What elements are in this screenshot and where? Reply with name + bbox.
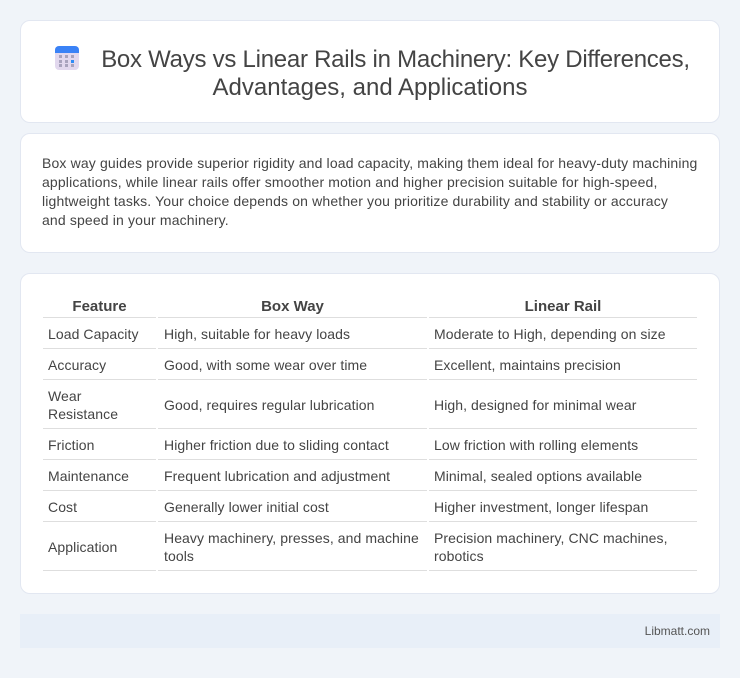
comparison table: Accuracy xyxy=(48,357,106,373)
comparison table: Good, requires regular lubrication xyxy=(164,397,374,413)
comparison table: Higher investment, longer lifespan xyxy=(434,499,648,515)
intro text: and speed in your machinery. xyxy=(42,212,229,228)
intro text: lightweight tasks. Your choice depends on whether you prioritize durability and stability or accuracy xyxy=(42,193,668,209)
intro text: applications, while linear rails offer smoother motion and higher precision suitable for high-speed, xyxy=(42,174,658,190)
comparison table: Feature xyxy=(72,298,127,315)
comparison table: Friction xyxy=(48,437,95,453)
intro text xyxy=(42,155,698,228)
comparison table: Good, with some wear over time xyxy=(164,357,367,373)
footer credit: Libmatt.com xyxy=(645,624,710,638)
comparison table: Excellent, maintains precision xyxy=(434,357,621,373)
footer xyxy=(20,614,720,648)
comparison table: Box Way xyxy=(261,298,324,315)
comparison table: Maintenance xyxy=(48,468,129,484)
comparison table: Low friction with rolling elements xyxy=(434,437,638,453)
panel: title card xyxy=(20,20,720,123)
comparison table: Cost xyxy=(48,499,77,515)
intro text: Box way guides provide superior rigidity and load capacity, making them ideal for heavy-duty machining xyxy=(42,155,698,171)
panel: comparison table xyxy=(20,273,720,594)
comparison table: Precision machinery, CNC machines, robotics xyxy=(434,530,668,564)
comparison table: High, designed for minimal wear xyxy=(434,397,636,413)
comparison table: Frequent lubrication and adjustment xyxy=(164,468,390,484)
comparison table: Load Capacity xyxy=(48,326,139,342)
title xyxy=(101,46,690,101)
comparison table: Linear Rail xyxy=(525,298,601,315)
comparison table: Heavy machinery, presses, and machine tools xyxy=(164,530,419,564)
panel: introduction xyxy=(20,133,720,253)
comparison table: Higher friction due to sliding contact xyxy=(164,437,389,453)
comparison table: High, suitable for heavy loads xyxy=(164,326,350,342)
comparison table: Application xyxy=(48,539,117,555)
comparison table: Minimal, sealed options available xyxy=(434,468,642,484)
comparison table: Moderate to High, depending on size xyxy=(434,326,666,342)
icon: calendar xyxy=(55,46,79,70)
comparison table: Wear Resistance xyxy=(48,388,118,422)
comparison table xyxy=(43,298,697,571)
title: Advantages, and Applications xyxy=(213,74,527,101)
comparison table: Generally lower initial cost xyxy=(164,499,329,515)
title: Box Ways vs Linear Rails in Machinery: Key Differences, xyxy=(101,46,690,73)
